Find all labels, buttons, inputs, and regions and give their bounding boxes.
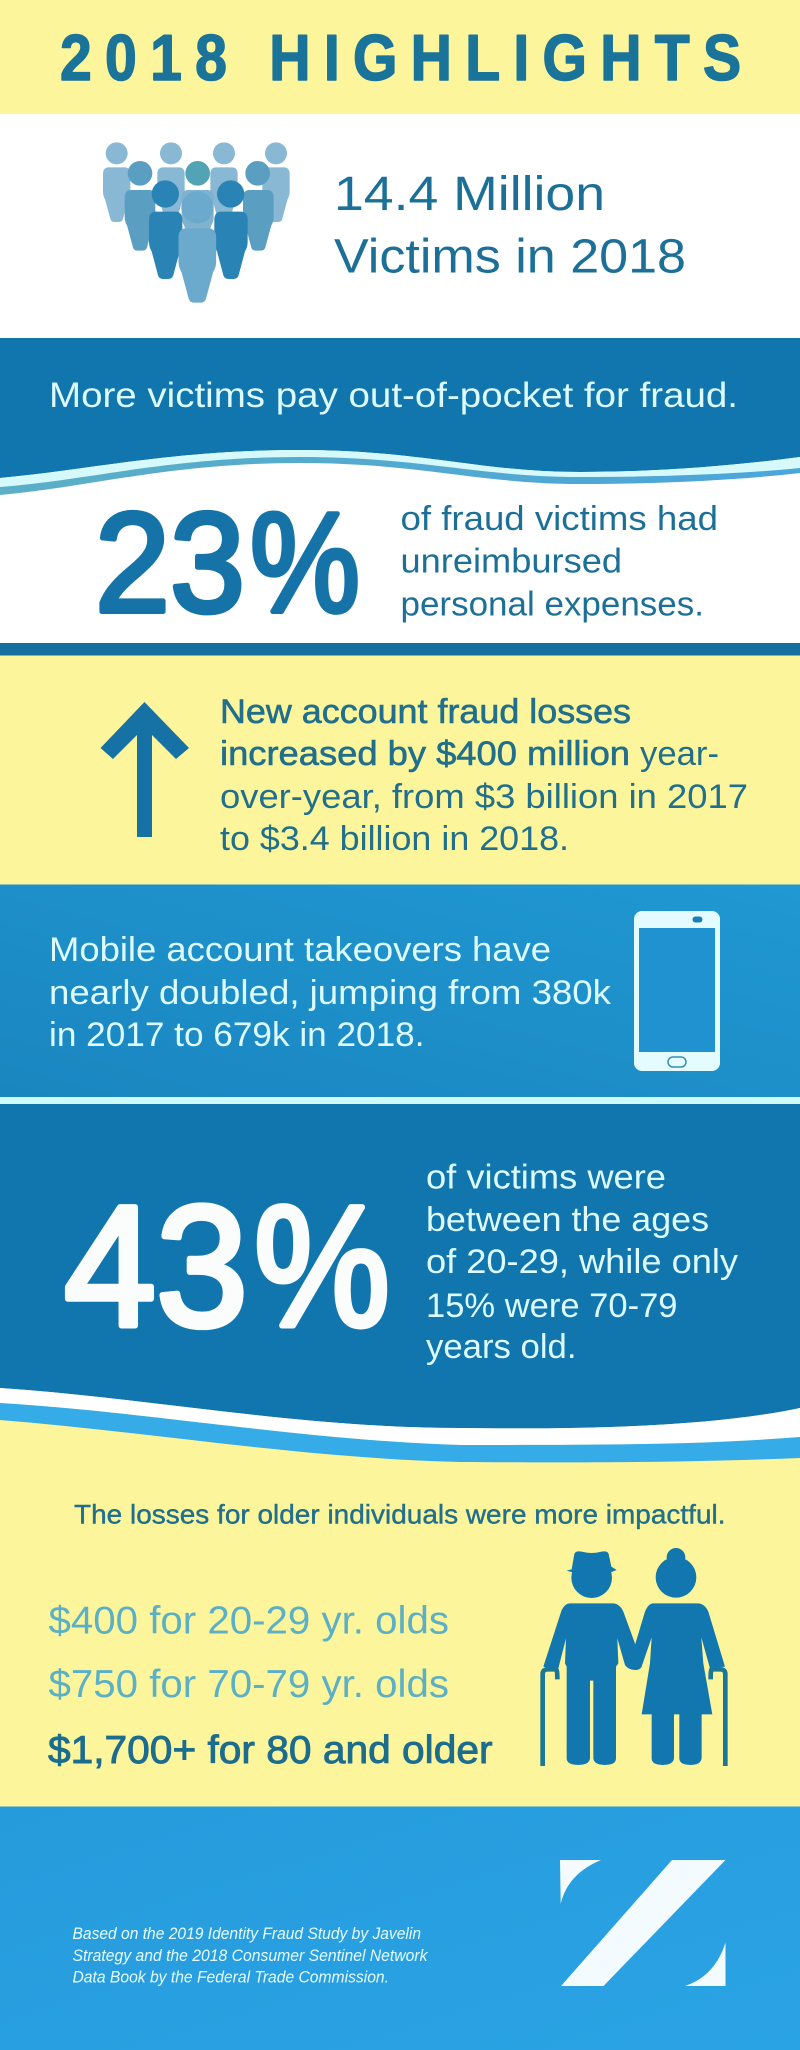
title: 2018 HIGHLIGHTS [60, 22, 741, 94]
list: losses by age group: $750 for 70-79 yr. olds [48, 1663, 449, 1706]
text: unreimbursed expenses: unreimbursed [400, 543, 622, 581]
heading: More victims pay out-of-pocket for fraud. [49, 376, 738, 415]
list: losses by age group [48, 1600, 493, 1772]
big number: 43 [64, 1170, 248, 1362]
text: sources: Strategy and the 2018 Consumer Sentinel Network [72, 1946, 429, 1965]
text: age ranges: between the ages [426, 1201, 709, 1239]
big number: % [250, 484, 360, 642]
text: mobile takeovers [49, 931, 612, 1054]
text: unreimbursed expenses [400, 500, 718, 624]
text: new account fraud losses: increased by $400 million [220, 735, 630, 773]
big number: 23 [95, 484, 245, 642]
panel: 43 percent stat [0, 1097, 800, 1806]
icon: elderly couple [543, 1548, 725, 1766]
icon: Z logo [560, 1860, 726, 1986]
text: new account fraud losses: to $3.4 billion in 2018. [220, 820, 569, 858]
heading: The losses for older individuals were more impactful. [74, 1500, 726, 1530]
list: losses by age group: $400 for 20-29 yr. olds [48, 1600, 449, 1642]
panel: new account fraud [0, 656, 800, 884]
panel: title band [0, 0, 800, 114]
arrow: up [100, 702, 189, 837]
panel: victims count [0, 114, 800, 338]
text: unreimbursed expenses: personal expenses. [400, 586, 704, 624]
panel: out-of-pocket heading [0, 338, 800, 508]
text: victims headline: Victims in 2018 [334, 230, 686, 284]
text: new account fraud losses [220, 693, 748, 858]
panel: 23 percent stat [0, 450, 800, 656]
icon: smartphone [634, 911, 720, 1071]
text: new account fraud losses: New account fraud losses [220, 693, 631, 731]
icon: crowd of people [103, 142, 290, 303]
text: age ranges [426, 1159, 738, 1366]
text: age ranges: 15% were 70-79 [426, 1287, 678, 1325]
text: victims headline [334, 168, 686, 284]
text: sources [72, 1924, 429, 1986]
text: sources: Based on the 2019 Identity Fraud Study by Javelin [72, 1924, 421, 1943]
panel: losses by age [48, 1500, 726, 1772]
text: sources: Data Book by the Federal Trade Commission. [72, 1968, 389, 1986]
text: mobile takeovers: nearly doubled, jumping from 380k [49, 974, 612, 1012]
panel: footer [0, 1806, 800, 2050]
text: age ranges: of 20-29, while only [426, 1243, 738, 1281]
panel: mobile account takeovers [0, 884, 800, 1098]
text: mobile takeovers: Mobile account takeovers have [49, 931, 551, 969]
text: new account fraud losses: year- [640, 735, 719, 773]
big number: % [254, 1170, 390, 1362]
text: victims headline: 14.4 Million [334, 168, 605, 221]
text: age ranges: years old. [426, 1328, 576, 1366]
list: losses by age group: $1,700+ for 80 and older [48, 1729, 493, 1772]
text: new account fraud losses: over-year, from $3 billion in 2017 [220, 778, 748, 816]
text: age ranges: of victims were [426, 1159, 666, 1197]
text: mobile takeovers: in 2017 to 679k in 2018. [49, 1016, 424, 1054]
text: unreimbursed expenses: of fraud victims had [400, 500, 718, 538]
